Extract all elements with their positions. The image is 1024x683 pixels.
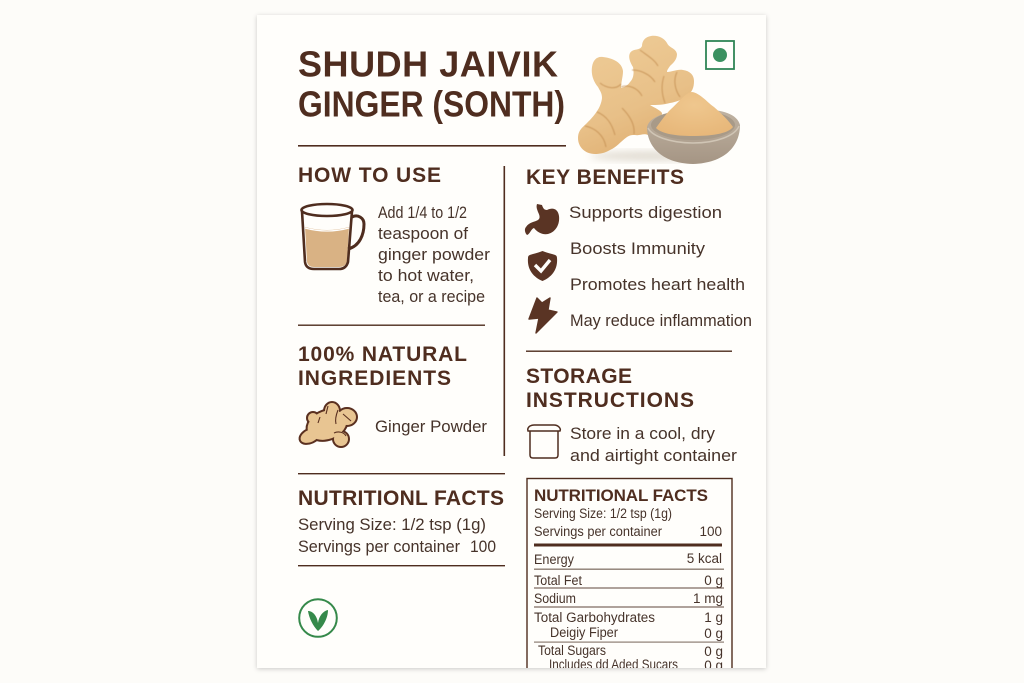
- title: [298, 44, 565, 124]
- panel: nutritional facts table: Serving Size: 1/2 tsp (1g): [534, 506, 672, 521]
- icon: airtight container: [528, 425, 560, 458]
- panel: short nutrition facts: 100: [470, 537, 496, 556]
- text: ingredient name: Ginger Powder: [375, 417, 487, 436]
- heading: natural ingredients: INGREDIENTS: [298, 367, 451, 390]
- text: how to use instructions: Add 1/4 to 1/2: [378, 203, 467, 222]
- heading: storage instructions: [526, 365, 694, 412]
- text: how to use instructions: [378, 203, 490, 306]
- text: how to use instructions: to hot water,: [378, 266, 474, 285]
- icon: ginger root: [298, 403, 356, 446]
- panel: nutritional facts table: Total Garbohydrates: [534, 610, 655, 625]
- title: SHUDH JAIVIK: [298, 44, 558, 84]
- panel: nutritional facts table: Total Sugars: [538, 643, 606, 658]
- icon: mug of ginger tea: [302, 204, 364, 269]
- text: boosts immunity: Boosts Immunity: [570, 239, 706, 258]
- icon: shield with check: [528, 251, 557, 281]
- icon: vegetarian mark: [706, 41, 734, 69]
- heading: storage instructions: INSTRUCTIONS: [526, 389, 694, 412]
- panel: nutritional facts table: [527, 478, 732, 683]
- text: how to use instructions: teaspoon of: [378, 224, 468, 243]
- icon: stomach: [525, 204, 559, 235]
- panel: short nutrition facts: [298, 487, 504, 556]
- icon: lightning bolt: [529, 298, 557, 333]
- panel: short nutrition facts: Serving Size: 1/2 tsp (1g): [298, 515, 486, 534]
- heading: natural ingredients: 100% NATURAL: [298, 343, 467, 366]
- heading: storage instructions: STORAGE: [526, 365, 632, 388]
- panel: short nutrition facts: NUTRITIONL FACTS: [298, 487, 504, 510]
- text: how to use instructions: ginger powder: [378, 245, 490, 264]
- text: may reduce inflammation: May reduce inflammation: [570, 311, 752, 330]
- panel: nutritional facts table: Total Fet: [534, 573, 582, 588]
- text: how to use instructions: tea, or a recipe: [378, 287, 485, 306]
- panel: nutritional facts table: Sodium: [534, 591, 576, 606]
- panel: nutritional facts table: 0 g: [704, 626, 723, 641]
- text: storage instructions: [570, 424, 737, 465]
- heading: key benefits: KEY BENEFITS: [526, 166, 684, 189]
- text: storage instructions: Store in a cool, dry: [570, 424, 715, 443]
- panel: nutritional facts table: 0 g: [704, 644, 723, 659]
- panel: nutritional facts table: 0 g: [704, 573, 723, 588]
- panel: nutritional facts table: Deigiy Fiper: [550, 625, 618, 640]
- text: storage instructions: and airtight container: [570, 446, 737, 465]
- panel: label card: [257, 15, 766, 668]
- panel: nutritional facts table: 1 g: [704, 610, 723, 625]
- heading: natural ingredients: [298, 343, 467, 390]
- text: promotes heart health: Promotes heart health: [570, 275, 745, 294]
- panel: short nutrition facts: Servings per container: [298, 537, 460, 556]
- panel: nutritional facts table: 0 g: [704, 658, 723, 673]
- ginger root and powder bowl illustration: [578, 36, 740, 164]
- infographic page: [255, 14, 768, 671]
- panel: nutritional facts table: NUTRITIONAL FACTS: [534, 486, 708, 505]
- text: supports digestion: Supports digestion: [569, 203, 722, 222]
- panel: nutritional facts table: 1 mg: [693, 591, 723, 606]
- heading: how to use: HOW TO USE: [298, 164, 441, 187]
- panel: nutritional facts table: Energy: [534, 552, 574, 567]
- icon: vegan v badge: [299, 599, 337, 637]
- panel: nutritional facts table: 5 kcal: [687, 551, 722, 566]
- panel: nutritional facts table: Includes dd Aded Sucars: [549, 657, 678, 672]
- panel: nutritional facts table: Servings per container: [534, 524, 662, 539]
- panel: nutritional facts table: 100: [699, 524, 722, 539]
- title: GINGER (SONTH): [298, 84, 565, 124]
